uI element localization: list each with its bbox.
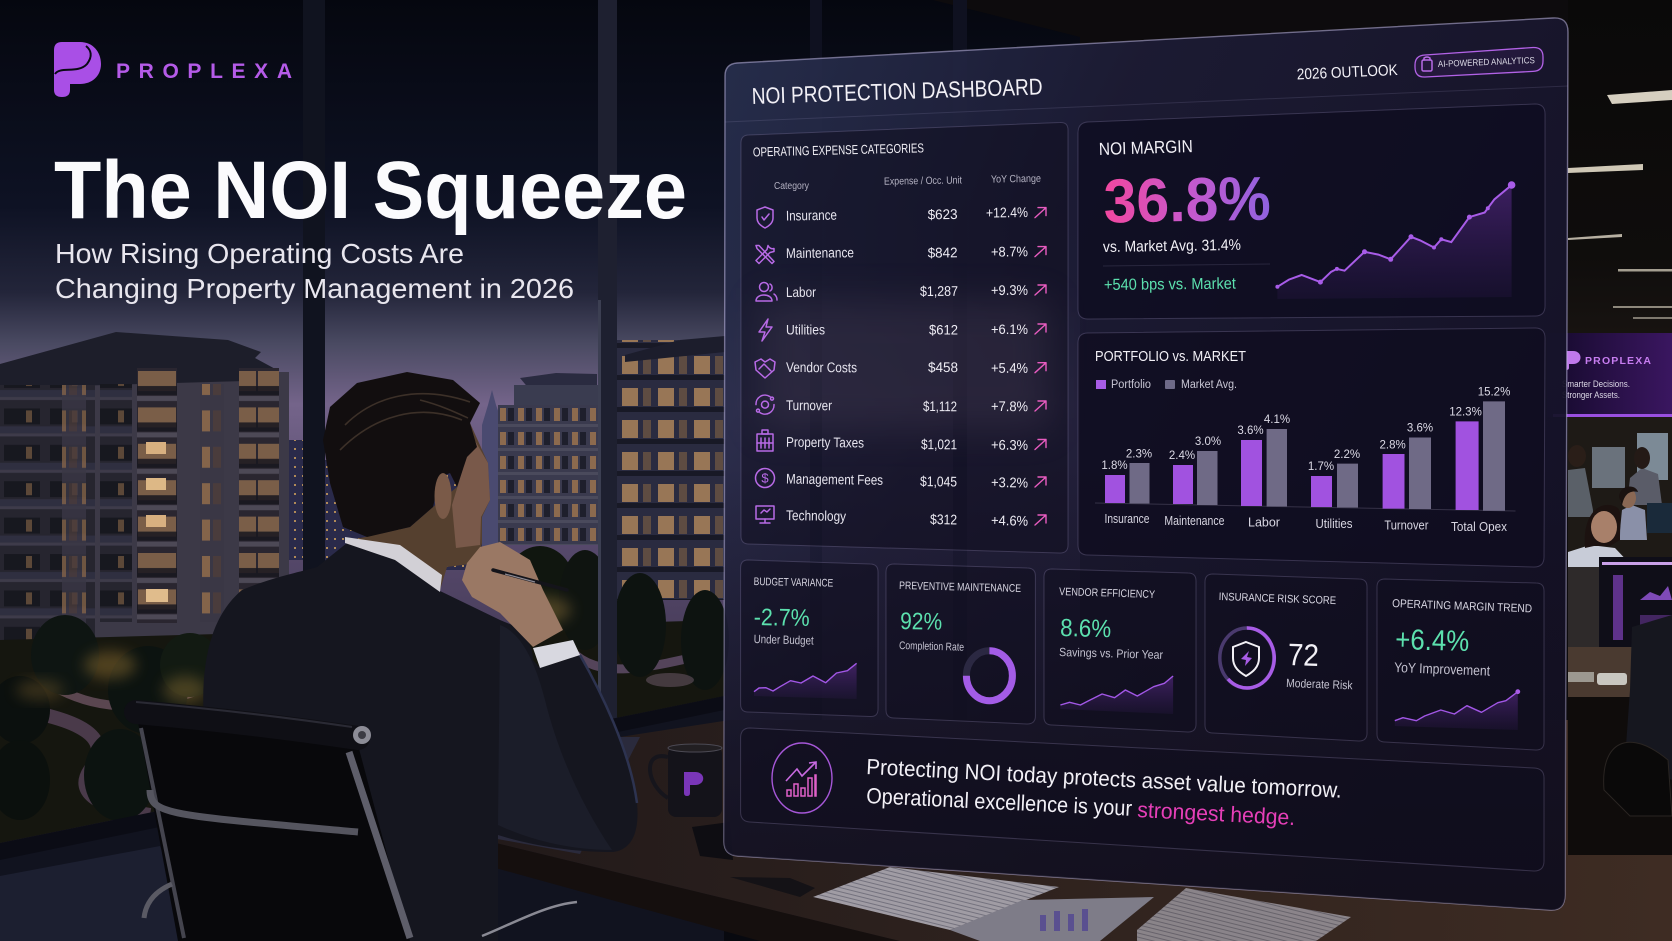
row: maintenance: +8.7% bbox=[991, 243, 1028, 260]
row: turnover: $1,112 bbox=[923, 398, 957, 414]
bar value labels bbox=[1101, 387, 1510, 473]
bar value labels: 2.2% bbox=[1334, 449, 1360, 461]
subtitle: How Rising Operating Costs Are bbox=[55, 238, 464, 269]
card: preventive maintenance bbox=[886, 564, 1035, 724]
row: utilities bbox=[759, 319, 1046, 341]
card: budget variance bbox=[741, 560, 878, 717]
takeaway text: strongest hedge. bbox=[1137, 797, 1296, 830]
basis points callout: +540 bps vs. Market bbox=[1104, 276, 1237, 294]
row: technology: Technology bbox=[786, 507, 846, 524]
card: insurance risk score bbox=[1205, 574, 1367, 741]
bar value labels: 12.3% bbox=[1449, 407, 1482, 419]
card: operating margin trend bbox=[1377, 579, 1544, 750]
row: vendor costs: Vendor Costs bbox=[786, 359, 857, 375]
card: vendor efficiency bbox=[1044, 569, 1196, 732]
row: vendor costs: +5.4% bbox=[991, 360, 1028, 376]
row: insurance bbox=[757, 204, 1046, 228]
subtitle: Changing Property Management in 2026 bbox=[55, 273, 574, 304]
card: vendor efficiency: 8.6% bbox=[1060, 614, 1112, 643]
portfolio heading: PORTFOLIO vs. MARKET bbox=[1095, 348, 1246, 365]
card: budget variance: -2.7% bbox=[753, 604, 810, 632]
row: labor bbox=[756, 282, 1046, 301]
row: turnover bbox=[756, 395, 1046, 414]
bar value labels: 2.8% bbox=[1379, 440, 1406, 452]
chart legend: Market Avg. bbox=[1181, 379, 1237, 391]
card: vendor efficiency: VENDOR EFFICIENCY bbox=[1059, 586, 1156, 601]
row: maintenance: $842 bbox=[928, 244, 958, 261]
row: maintenance: Maintenance bbox=[786, 244, 854, 261]
landscaped grounds and trees bbox=[0, 546, 729, 843]
row: property taxes: $1,021 bbox=[921, 436, 957, 452]
card: preventive maintenance: Completion Rate bbox=[899, 640, 964, 654]
card: operating margin trend: +6.4% bbox=[1395, 624, 1470, 658]
panel: portfolio vs market bar chart bbox=[1078, 328, 1545, 567]
right apartment building bbox=[617, 336, 725, 600]
bar value labels: 3.0% bbox=[1195, 436, 1221, 448]
row: property taxes: +6.3% bbox=[991, 437, 1028, 453]
table heading: OPERATING EXPENSE CATEGORIES bbox=[753, 140, 924, 159]
market average comparison: vs. Market Avg. 31.4% bbox=[1103, 237, 1241, 256]
centre apartment building bbox=[498, 373, 598, 545]
card: preventive maintenance: 92% bbox=[900, 608, 942, 636]
row: turnover: Turnover bbox=[786, 397, 832, 413]
left apartment building bbox=[0, 332, 289, 650]
2026 outlook label: 2026 OUTLOOK bbox=[1296, 62, 1399, 83]
subtitle bbox=[55, 238, 574, 304]
bar value labels: 4.1% bbox=[1264, 414, 1290, 426]
logo: Proplexa: PROPLEXA bbox=[116, 60, 292, 83]
bar value labels: 1.7% bbox=[1308, 461, 1334, 473]
wall screen with Proplexa branding: Smarter Decisions. bbox=[1562, 379, 1630, 390]
icon: rising chart badge bbox=[772, 743, 832, 813]
bar category labels bbox=[1104, 512, 1508, 534]
card: insurance risk score: Moderate Risk bbox=[1286, 676, 1354, 692]
bar value labels: 15.2% bbox=[1478, 387, 1510, 399]
card: insurance risk score: 72 bbox=[1287, 637, 1319, 673]
row: technology: $312 bbox=[930, 511, 957, 527]
row: maintenance bbox=[756, 243, 1046, 264]
takeaway text: Protecting NOI today protects asset value tomorrow. bbox=[866, 754, 1342, 803]
dashboard title: NOI PROTECTION DASHBOARD bbox=[751, 73, 1043, 109]
chart legend bbox=[1096, 379, 1237, 391]
row: turnover: +7.8% bbox=[991, 398, 1028, 414]
bar category labels: Total Opex bbox=[1451, 520, 1508, 534]
card: operating margin trend: YoY Improvement bbox=[1394, 659, 1491, 679]
row: utilities: +6.1% bbox=[991, 321, 1028, 337]
card: operating margin trend: OPERATING MARGIN TREND bbox=[1392, 598, 1532, 615]
row: technology: +4.6% bbox=[991, 512, 1028, 529]
table column headers: Expense / Occ. Unit bbox=[884, 174, 962, 188]
row: property taxes bbox=[757, 430, 1046, 453]
row: management fees bbox=[756, 468, 1046, 491]
wall screen with Proplexa branding bbox=[1547, 333, 1672, 417]
bar category labels: Utilities bbox=[1316, 517, 1352, 531]
wall screen with Proplexa branding: Stronger Assets. bbox=[1562, 390, 1620, 401]
row: management fees: Management Fees bbox=[786, 471, 883, 488]
office chair bbox=[136, 702, 577, 941]
row: labor: Labor bbox=[786, 284, 816, 300]
row: labor: +9.3% bbox=[991, 282, 1028, 298]
card: preventive maintenance: PREVENTIVE MAINTENANCE bbox=[899, 580, 1021, 595]
row: management fees: $ bbox=[761, 470, 769, 486]
row: insurance: +12.4% bbox=[986, 204, 1028, 221]
NOI margin line chart bbox=[1275, 181, 1515, 299]
row: vendor costs bbox=[755, 359, 1046, 378]
bar value labels: 2.4% bbox=[1169, 450, 1195, 462]
banner: key takeaway bbox=[741, 728, 1544, 871]
panel: operating expense categories bbox=[741, 122, 1068, 553]
card: vendor efficiency: Savings vs. Prior Year bbox=[1059, 645, 1163, 662]
row: utilities: Utilities bbox=[786, 322, 825, 338]
card: budget variance: BUDGET VARIANCE bbox=[754, 576, 833, 590]
row: insurance: Insurance bbox=[786, 207, 837, 223]
bars bbox=[1095, 401, 1516, 511]
takeaway text bbox=[866, 754, 1342, 830]
card: insurance risk score: INSURANCE RISK SCORE bbox=[1218, 591, 1336, 607]
NOI margin figure: 36.8% bbox=[1103, 165, 1271, 236]
glass dashboard panel bbox=[724, 18, 1568, 910]
bar category labels: Maintenance bbox=[1164, 514, 1224, 528]
chart legend: Portfolio bbox=[1111, 379, 1151, 391]
row: management fees: $1,045 bbox=[920, 473, 957, 490]
logo: Proplexa bbox=[54, 42, 292, 97]
office staff and monitors bbox=[1568, 417, 1672, 855]
desk bbox=[492, 720, 1672, 941]
wall screen with Proplexa branding: PROPLEXA bbox=[1585, 355, 1651, 367]
NOI margin heading: NOI MARGIN bbox=[1098, 136, 1193, 159]
window mullions and floor bbox=[0, 0, 967, 941]
AI-powered analytics badge: AI-POWERED ANALYTICS bbox=[1438, 55, 1535, 69]
row: labor: $1,287 bbox=[920, 283, 958, 299]
bar category labels: Insurance bbox=[1104, 512, 1150, 526]
title: The NOI Squeeze bbox=[54, 145, 687, 236]
takeaway text: Operational excellence is your bbox=[866, 783, 1133, 821]
bar value labels: 3.6% bbox=[1237, 425, 1264, 437]
table column headers: YoY Change bbox=[991, 173, 1041, 186]
row: utilities: $612 bbox=[929, 322, 958, 338]
table column headers: Category bbox=[774, 181, 809, 192]
row: insurance: $623 bbox=[927, 206, 958, 222]
bar value labels: 2.3% bbox=[1126, 448, 1152, 460]
office wall and ceiling lights on the right bbox=[1568, 0, 1672, 855]
table column headers bbox=[774, 173, 1041, 192]
businessman seen from behind bbox=[203, 372, 638, 941]
AI-powered analytics badge bbox=[1415, 47, 1543, 77]
bar category labels: Labor bbox=[1248, 515, 1280, 529]
coffee mug with logo bbox=[650, 744, 722, 817]
row: management fees: +3.2% bbox=[991, 474, 1028, 491]
row: technology bbox=[756, 506, 1046, 529]
row: vendor costs: $458 bbox=[928, 359, 958, 375]
bar category labels: Turnover bbox=[1384, 519, 1428, 533]
bar value labels: 1.8% bbox=[1101, 460, 1128, 472]
papers on desk bbox=[692, 822, 1351, 941]
card: budget variance: Under Budget bbox=[754, 632, 814, 648]
panel: NOI margin bbox=[1078, 104, 1545, 319]
bar value labels: 3.6% bbox=[1407, 422, 1433, 434]
row: property taxes: Property Taxes bbox=[786, 434, 864, 451]
